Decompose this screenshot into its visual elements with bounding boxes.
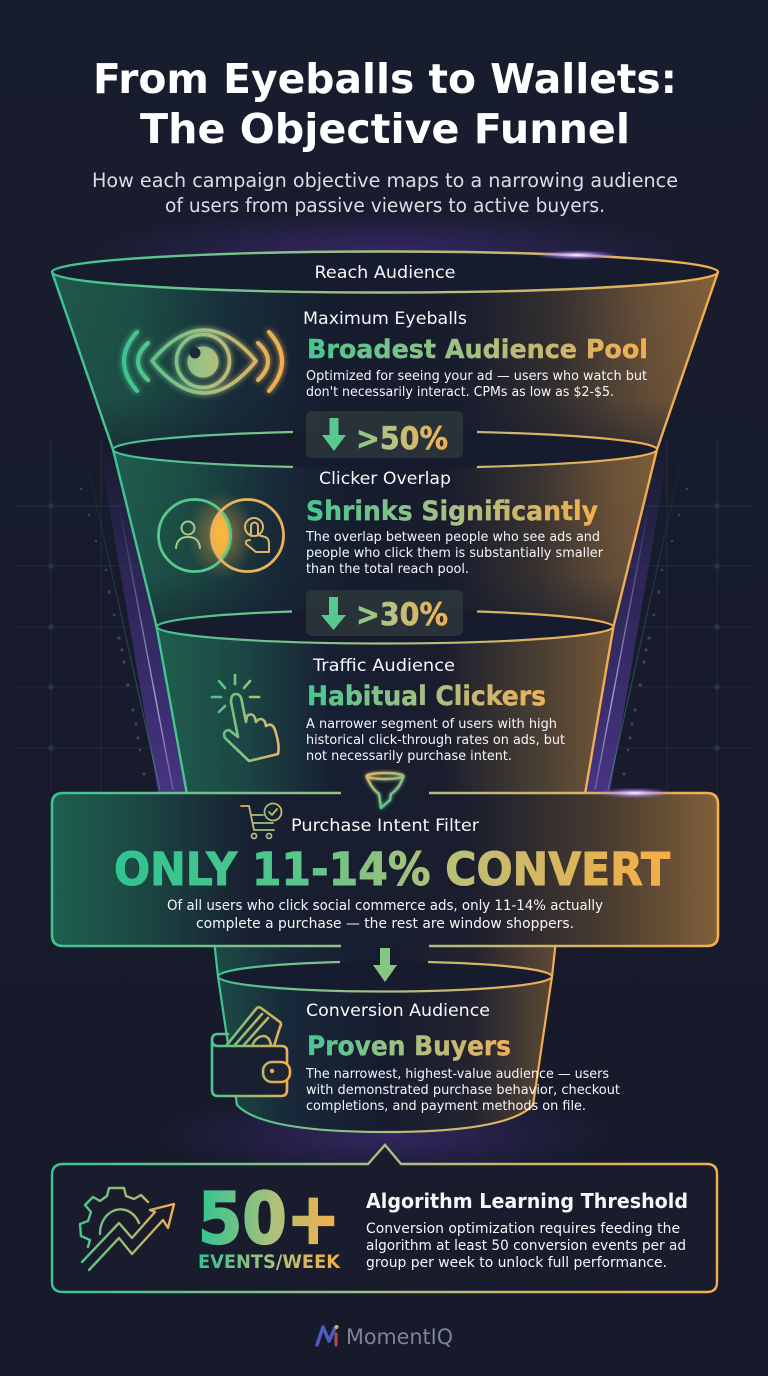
icon: shopping cart with check [241, 804, 282, 838]
funnel section 4: conversion [214, 940, 556, 1132]
logo: MomentIQ: MomentIQ [346, 1325, 453, 1349]
badge: drop over 30 percent [306, 590, 463, 636]
text block: shrinks significantly [305, 496, 604, 577]
title [93, 55, 677, 153]
badge: drop over 50 percent [306, 411, 463, 458]
badge: drop over 30 percent: >30% [356, 597, 448, 633]
text block: conversion audience: with demonstrated purchase behavior, checkout [306, 1083, 620, 1098]
text block: maximum eyeballs: don't necessarily interact. CPMs as low as $2-$5. [306, 385, 614, 400]
description: Conversion optimization requires feeding the [366, 1221, 680, 1237]
description: Of all users who click social commerce ads, only 11-14% actually [167, 898, 603, 914]
description: algorithm at least 50 conversion events per ad [366, 1238, 686, 1254]
label: purchase intent filter: Purchase Intent Filter [291, 816, 479, 835]
text block: shrinks significantly: than the total reach pool. [306, 562, 469, 577]
badge: drop over 50 percent: >50% [356, 421, 448, 457]
text block: shrinks significantly: Shrinks Significantly [306, 496, 598, 527]
icon: tap finger [245, 518, 269, 552]
text block: conversion audience: Proven Buyers [307, 1031, 511, 1062]
text block: maximum eyeballs: Maximum Eyeballs [303, 309, 467, 328]
title: From Eyeballs to Wallets: [93, 55, 677, 103]
description [366, 1221, 686, 1271]
text block: maximum eyeballs [303, 309, 648, 400]
subtitle: How each campaign objective maps to a narrowing audience [92, 169, 678, 192]
text block: maximum eyeballs: Optimized for seeing your ad — users who watch but [306, 369, 647, 384]
arrow: down to conversion [373, 948, 397, 982]
text block: traffic audience: Traffic Audience [312, 656, 455, 675]
text block: traffic audience: Habitual Clickers [307, 681, 546, 712]
icon: venn diagram [158, 491, 284, 579]
text block: maximum eyeballs: Broadest Audience Pool [307, 335, 648, 365]
funnel section 3: traffic [156, 610, 614, 800]
icon: funnel filter [366, 773, 404, 808]
subtitle: of users from passive viewers to active buyers. [165, 194, 605, 217]
text block: conversion audience: The narrowest, highest-value audience — users [305, 1067, 609, 1082]
description [167, 898, 603, 932]
icon: clicking hand [212, 675, 279, 761]
label: reach audience: Reach Audience [314, 263, 456, 282]
text block: shrinks significantly: people who click them is substantially smaller [306, 546, 604, 561]
icon: wallet [212, 1007, 290, 1096]
description: complete a purchase — the rest are window shoppers. [196, 916, 574, 932]
heading: algorithm learning threshold: Algorithm Learning Threshold [366, 1189, 688, 1213]
text block: conversion audience [305, 1001, 620, 1114]
text block: traffic audience: A narrower segment of users with high [306, 717, 557, 732]
text block: traffic audience [306, 656, 565, 764]
big stat: only 11-14 percent convert: ONLY 11-14% CONVERT [114, 843, 670, 896]
funnel section 2: clicker overlap [113, 431, 657, 644]
label: clicker overlap: Clicker Overlap [319, 469, 451, 488]
stat: 50 plus: 50+ [198, 1178, 340, 1260]
description: group per week to unlock full performance. [366, 1255, 667, 1271]
stat label: events per week: EVENTS/WEEK [198, 1251, 341, 1273]
icon: eye with signal waves [124, 330, 282, 393]
title: The Objective Funnel [140, 105, 630, 153]
panel: algorithm learning threshold [52, 1145, 717, 1292]
subtitle [92, 169, 678, 217]
icon: gear with rising arrow [80, 1188, 174, 1270]
text block: shrinks significantly: The overlap between people who see ads and [305, 530, 600, 545]
text block: conversion audience: completions, and payment methods on file. [306, 1099, 586, 1114]
panel: purchase intent filter [52, 773, 718, 946]
funnel [52, 250, 718, 1132]
funnel section 1: reach [52, 250, 718, 468]
text block: traffic audience: historical click-through rates on ads, but [306, 733, 565, 748]
text block: traffic audience: not necessarily purchase intent. [306, 749, 512, 764]
text block: conversion audience: Conversion Audience [306, 1001, 490, 1020]
icon: person [176, 522, 200, 548]
